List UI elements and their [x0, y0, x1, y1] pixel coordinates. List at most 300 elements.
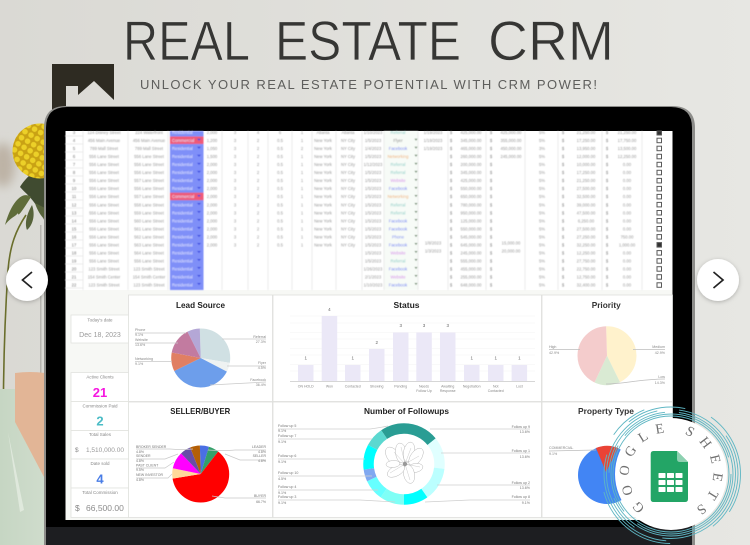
column: lead date: 1/10/2023 [364, 283, 383, 288]
column: list price: 550,000.00 [461, 186, 482, 191]
column: state: New York [314, 226, 333, 231]
column: list price: 545,000.00 [461, 234, 482, 239]
column: lead date: 1/5/2023 [365, 258, 382, 263]
column: half baths: 0.5 [277, 202, 284, 207]
logo: house badge [52, 64, 114, 121]
row numbers: 18 [72, 250, 77, 255]
column: paid dollar signs: $ [606, 210, 609, 215]
segment labels: Follow up 8 [512, 495, 530, 499]
column: property address: 560 Lane Street [134, 218, 165, 223]
column: garage: 1 [301, 226, 304, 231]
row numbers: 7 [73, 162, 76, 167]
pie [186, 460, 215, 488]
column: lead date: 1/5/2023 [365, 178, 382, 183]
column: commission amount: 13,950.00 [577, 146, 596, 151]
column: commission paid: 0.00 [623, 170, 632, 175]
column: property type labels: Residential [172, 154, 193, 159]
column: property address: 154 Smith Center [133, 275, 166, 280]
column: commission amount: 47,500.00 [577, 210, 596, 215]
date sold: 4 [96, 472, 104, 486]
column: seller address: 556 Lane Street [89, 170, 120, 175]
column: commission dollar signs: $ [562, 170, 565, 175]
slice labels [136, 445, 266, 504]
column: half baths: 0.5 [277, 154, 284, 159]
column: lead source: Referral [391, 258, 406, 263]
column: garage: 1 [301, 218, 304, 223]
slice labels: Website [135, 338, 148, 342]
column: half baths: 0.5 [277, 218, 284, 223]
column: paid dollar signs: $ [606, 234, 609, 239]
column: state: New York [314, 194, 333, 199]
column: lead date: 1/26/2023 [364, 267, 383, 272]
pie [578, 446, 636, 504]
column: commission paid: 13,500.00 [618, 146, 637, 151]
column: commission dollar signs: $ [562, 210, 565, 215]
column: bathrooms: 2 [257, 242, 260, 247]
column: seller address: 556 Lane Street [89, 226, 120, 231]
column: commission dollar signs: $ [562, 202, 565, 207]
heading: Priority [592, 300, 621, 310]
column: sold price: 425,000.00 [501, 130, 522, 135]
column: lead source: Website [390, 250, 406, 255]
column: sold dollar signs: $ [490, 146, 493, 151]
column: commission dollar signs: $ [562, 162, 565, 167]
column: bedrooms: 3 [234, 194, 237, 199]
slice labels: SENDER [136, 454, 151, 458]
column: paid dollar signs: $ [606, 130, 609, 135]
column: seller address: 556 Lane Street [89, 162, 120, 167]
column: half baths: 0.5 [277, 210, 284, 215]
today's date: Today's date [87, 318, 113, 322]
column: city: NY City [341, 186, 356, 191]
column: lead date: 1/5/2023 [365, 210, 382, 215]
column: dollar signs: $ [450, 146, 453, 151]
column: sold dollar signs: $ [490, 250, 493, 255]
column: bedrooms: 3 [234, 226, 237, 231]
slice labels: 4.8% [258, 450, 266, 454]
slice labels: 42.9% [549, 351, 560, 355]
column: property type labels: Residential [172, 242, 193, 247]
column: commission rate: 5% [539, 283, 545, 288]
column: bathrooms: 2 [257, 202, 260, 207]
today's date [79, 318, 121, 339]
column: commission dollar signs: $ [562, 275, 565, 280]
column: city: NY City [341, 154, 356, 159]
category labels: ON HOLD [298, 384, 314, 388]
column: bathrooms: 2 [257, 138, 260, 143]
column: state: New York [314, 218, 333, 223]
column: sold dollar signs: $ [490, 170, 493, 175]
slice labels: High [549, 345, 556, 349]
title: REAL [123, 9, 250, 72]
category labels [298, 384, 523, 393]
column: commission amount: 27,500.00 [577, 186, 596, 191]
column: list price: 200,000.00 [461, 162, 482, 167]
yellow flower ball [12, 124, 44, 178]
column: state: New York [314, 162, 333, 167]
column: property address: 557 Lane Street [134, 178, 165, 183]
total commission: 66,500.00 [86, 503, 124, 513]
column: property address: 123 Smith Street [133, 283, 165, 288]
column: commission paid: 0.00 [623, 186, 632, 191]
column: dollar signs: $ [450, 162, 453, 167]
column: lead date: 1/5/2023 [365, 194, 382, 199]
row numbers: 22 [72, 283, 77, 288]
segment labels: Follow up 6 [278, 454, 296, 458]
column: property type labels: Residential [172, 130, 193, 135]
column: garage: 1 [301, 138, 304, 143]
column: sold dollar signs: $ [490, 226, 493, 231]
column: commission amount: 12,750.00 [577, 275, 596, 280]
column: commission rate: 5% [539, 186, 545, 191]
column: lead source: Networking [388, 154, 409, 159]
column: commission amount: 6,250.00 [578, 218, 595, 223]
column: seller address: 556 Lane Street [89, 202, 120, 207]
column: sold dollar signs: $ [490, 178, 493, 183]
chart: priority [549, 300, 666, 385]
total sales: Total Sales [89, 432, 112, 437]
row numbers: 10 [72, 186, 77, 191]
column: paid dollar signs: $ [606, 218, 609, 223]
column: bathrooms: 2 [257, 210, 260, 215]
column: property type labels: Commercial [172, 194, 194, 199]
column: property type labels: Residential [172, 218, 193, 223]
column: half baths: 6 [279, 130, 282, 135]
column: garage: 1 [301, 162, 304, 167]
segment labels: Follow up 1 [512, 449, 530, 453]
heading: Property Type [578, 406, 634, 416]
column: close dates: 1/8/2023 [425, 240, 442, 245]
column: lead date: 2/1/2023 [365, 275, 382, 280]
column: bedrooms: 3 [234, 162, 237, 167]
column: garage: 1 [301, 170, 304, 175]
slice labels: 4.5% [258, 366, 267, 370]
column: commission dollar signs: $ [562, 250, 565, 255]
column: bathrooms: 2 [257, 178, 260, 183]
column: sold dollar signs: $ [490, 283, 493, 288]
column: commission paid: 0.00 [623, 226, 632, 231]
column: half baths: 0.5 [277, 186, 284, 191]
column: sold dollar signs: $ [490, 234, 493, 239]
chart: status [290, 300, 535, 393]
total commission [75, 490, 124, 513]
segment labels [278, 424, 531, 505]
column: lead date: 1/5/2023 [365, 170, 382, 175]
laptop [44, 106, 695, 545]
category labels: Contacted [488, 389, 504, 393]
column: commission dollar signs: $ [562, 242, 565, 247]
category labels: Won [326, 384, 333, 388]
column: commission rate: 5% [539, 250, 545, 255]
category labels: Not [493, 384, 498, 388]
column: city: NY City [341, 146, 356, 151]
column: size and rooms: 2,000 [207, 178, 218, 183]
column: commission amount: 17,250.00 [577, 138, 596, 143]
column: lead date: 1/5/2023 [365, 138, 382, 143]
row numbers: 4 [73, 138, 76, 143]
column: dollar signs: $ [450, 202, 453, 207]
column: list price: 425,000.00 [461, 130, 482, 135]
column: list price: 345,000.00 [461, 170, 482, 175]
column: paid dollar signs: $ [606, 138, 609, 143]
column: commission dollar signs: $ [562, 218, 565, 223]
column: lead date: 1/12/2023 [364, 162, 383, 167]
slice labels: PAST CLIENT [136, 464, 159, 468]
column: sold dollar signs: $ [490, 210, 493, 215]
column: size and rooms: 2,000 [207, 210, 218, 215]
total sales [75, 432, 124, 454]
segment labels: 9.1% [278, 440, 287, 444]
column: commission dollar signs: $ [562, 258, 565, 263]
white disc [615, 418, 727, 530]
total sales: 1,510,000.00 [86, 447, 124, 454]
column: half baths: 0.5 [277, 194, 284, 199]
dashboard panels [128, 295, 672, 518]
values: 3 [399, 323, 402, 328]
column: commission paid: 750.00 [621, 234, 634, 239]
column: list price: 255,000.00 [461, 275, 482, 280]
row numbers: 21 [72, 275, 77, 280]
green glass vase [0, 389, 44, 545]
column: bathrooms: 2 [257, 218, 260, 223]
column: state: New York [314, 210, 333, 215]
segment labels: 9.1% [278, 501, 287, 505]
slice labels: Facebook [250, 378, 266, 382]
column: commission rate: 5% [539, 210, 545, 215]
column: property type labels: Residential [172, 250, 193, 255]
column: close dates: 1/3/2023 [425, 248, 442, 253]
column: garage: 1 [301, 210, 304, 215]
column: city: NY City [341, 170, 356, 175]
screen [66, 131, 672, 520]
column: commission amount: 27,750.00 [577, 258, 596, 263]
column: bedrooms: 3 [234, 234, 237, 239]
row numbers: 12 [72, 202, 77, 207]
column: commission amount: 27,500.00 [577, 226, 596, 231]
chip dropdown arrows [197, 139, 201, 285]
column: commission amount: 22,750.00 [577, 267, 596, 272]
column: commission paid: 0.00 [623, 194, 632, 199]
column: lead source: Referral [391, 162, 406, 167]
column: seller address: 124 Disney Street [87, 130, 121, 135]
flower stem [4, 215, 26, 390]
column: bedrooms: 3 [234, 202, 237, 207]
column: dollar signs: $ [450, 138, 453, 143]
column: size and rooms: 2,000 [207, 218, 218, 223]
column: lead source: Referral [391, 202, 406, 207]
column: property address: 557 Lane Street [134, 194, 165, 199]
dark leaf [20, 176, 44, 220]
column: bathrooms: 2 [257, 170, 260, 175]
column: property address: 562 Lane Street [134, 234, 165, 239]
column: property type labels: Residential [172, 283, 193, 288]
column: commission rate: 5% [539, 178, 545, 183]
column: dollar signs: $ [450, 226, 453, 231]
column: commission rate: 5% [539, 130, 545, 135]
chart: seller/buyer [136, 406, 266, 504]
column: close dates: 1/19/2023 [424, 130, 443, 135]
column: list price: 648,000.00 [461, 283, 482, 288]
column: lead source: Flyer [393, 138, 403, 143]
column: sold dollar signs: $ [490, 138, 493, 143]
column: state: Atlanta [316, 130, 330, 135]
slice labels: 66.7% [256, 500, 266, 504]
column: state: New York [314, 138, 333, 143]
previous arrow button [6, 259, 48, 301]
column: garage: 1 [301, 242, 304, 247]
row numbers: 15 [72, 226, 77, 231]
property type chips [170, 131, 204, 290]
row numbers: 5 [73, 146, 76, 151]
column: seller address: 556 Lane Street [89, 194, 120, 199]
column: paid dollar signs: $ [606, 267, 609, 272]
heading: SELLER/BUYER [170, 406, 230, 416]
column: city: NY City [341, 242, 356, 247]
column: property address: 789 Mall Street [135, 146, 164, 151]
column: lead date: 1/4/2023 [365, 146, 382, 151]
column: lead source: Facebook [389, 283, 408, 288]
icon: google sheets [651, 451, 688, 502]
column: paid dollar signs: $ [606, 250, 609, 255]
column: commission paid: 17,750.00 [618, 138, 637, 143]
segment labels: 9.1% [278, 491, 287, 495]
values: 3 [446, 323, 449, 328]
active charts: Active Clients [86, 374, 114, 380]
column: commission rate: 5% [539, 194, 545, 199]
column: size and rooms: 2,000 [207, 186, 218, 191]
column: dollar signs: $ [450, 186, 453, 191]
column: paid dollar signs: $ [606, 242, 609, 247]
column: seller address: 556 Lane Street [89, 242, 120, 247]
category labels: Awaiting [441, 384, 454, 388]
column: size and rooms: 1,050 [207, 146, 218, 151]
column: lead source: Website [390, 178, 406, 183]
column: commission amount: 27,250.00 [577, 234, 596, 239]
slice labels: Phone [135, 328, 145, 332]
column: dollar signs: $ [450, 267, 453, 272]
column: half baths: 0.5 [277, 138, 284, 143]
column: commission paid: 0.00 [623, 202, 632, 207]
column: lead date: 1/5/2023 [365, 234, 382, 239]
column: commission rate: 5% [539, 154, 545, 159]
column: size and rooms: 2,000 [207, 170, 218, 175]
column: lead date: 1/5/2023 [365, 226, 382, 231]
slice labels: Medium [652, 345, 665, 349]
column: dollar signs: $ [450, 250, 453, 255]
date sold: Date sold [90, 461, 110, 466]
slice labels: 9.1% [135, 333, 144, 337]
column: property address: 556 Lane Street [134, 186, 165, 191]
column: dollar signs: $ [450, 194, 453, 199]
column: property type labels: Residential [172, 170, 193, 175]
column: garage: 1 [301, 234, 304, 239]
row numbers: 6 [73, 154, 76, 159]
pie [592, 341, 622, 370]
slice labels [135, 328, 267, 387]
values: 1 [304, 356, 307, 360]
column: dollar signs: $ [450, 258, 453, 263]
column: half baths: 0.5 [277, 178, 284, 183]
column: list price: 125,000.00 [461, 218, 482, 223]
segment labels: Follow up 3 [278, 495, 296, 499]
column: city: NY City [341, 234, 356, 239]
row numbers: 20 [72, 267, 77, 272]
column: paid dollar signs: $ [606, 226, 609, 231]
column: city: NY City [341, 210, 356, 215]
next arrow button [697, 259, 739, 301]
column: paid dollar signs: $ [606, 194, 609, 199]
segment labels: 9.1% [522, 501, 531, 505]
column: commission paid: 0.00 [623, 275, 632, 280]
column: commission rate: 5% [539, 267, 545, 272]
column: commission rate: 5% [539, 226, 545, 231]
column: seller address: 789 Mall Street [90, 146, 119, 151]
column: commission paid: 0.00 [623, 162, 632, 167]
column: sold dollar signs: $ [490, 202, 493, 207]
column: half baths: 0.5 [277, 242, 284, 247]
column: bathrooms: 2 [257, 154, 260, 159]
segment labels: Follow up 5 [278, 424, 296, 428]
column: dollar signs: $ [450, 210, 453, 215]
column: property address: 456 Main Avenue [133, 138, 166, 143]
column: commission dollar signs: $ [562, 154, 565, 159]
category labels: Needs [419, 384, 429, 388]
slice labels: 9.1% [135, 362, 144, 366]
column: property address: 556 Lane Street [134, 258, 165, 263]
slice label [549, 446, 573, 456]
column: lead date: 1/5/2023 [365, 250, 382, 255]
column: dollar signs: $ [450, 234, 453, 239]
column: paid dollar signs: $ [606, 178, 609, 183]
column: commission dollar signs: $ [562, 283, 565, 288]
slice labels: 4.8% [136, 459, 144, 463]
slice labels: Networking [135, 357, 153, 361]
column: seller address: 556 Lane Street [89, 218, 120, 223]
subtitle: UNLOCK YOUR REAL ESTATE POTENTIAL WITH CRM POWER! [140, 77, 597, 92]
column: bathrooms: 2 [257, 194, 260, 199]
leader lines [549, 350, 665, 384]
column: commission rate: 5% [539, 258, 545, 263]
column: bedrooms: 3 [234, 170, 237, 175]
slice labels: LEADER [252, 445, 266, 449]
bars [298, 316, 527, 381]
column: garage: 1 [301, 154, 304, 159]
column: city: NY City [341, 138, 356, 143]
column: list price: 650,000.00 [461, 194, 482, 199]
category labels: Pending [394, 384, 407, 388]
column: state: New York [314, 178, 333, 183]
column: sold price: 450,000.00 [501, 146, 522, 151]
column: commission dollar signs: $ [562, 146, 565, 151]
column: half baths: 0.5 [277, 170, 284, 175]
values [304, 307, 521, 360]
left leaf [5, 195, 31, 225]
column: dollar signs: $ [450, 178, 453, 183]
column: property address: 556 Lane Street [134, 170, 165, 175]
column: list price: 465,000.00 [461, 146, 482, 151]
slice labels: BROKER SENDER [136, 445, 167, 449]
column: half baths: 0.5 [277, 146, 284, 151]
column: seller address: 123 Smith Street [88, 283, 120, 288]
peach cylinder vase [15, 372, 44, 477]
segment labels: Follow up 4 [278, 485, 296, 489]
column: sold dollar signs: $ [490, 275, 493, 280]
column: size and rooms: 2,000 [207, 226, 218, 231]
column: property type labels: Commercial [172, 138, 194, 143]
active charts: 21 [93, 385, 107, 400]
column: garage: 1 [301, 178, 304, 183]
column: size and rooms: 2,000 [207, 130, 218, 135]
